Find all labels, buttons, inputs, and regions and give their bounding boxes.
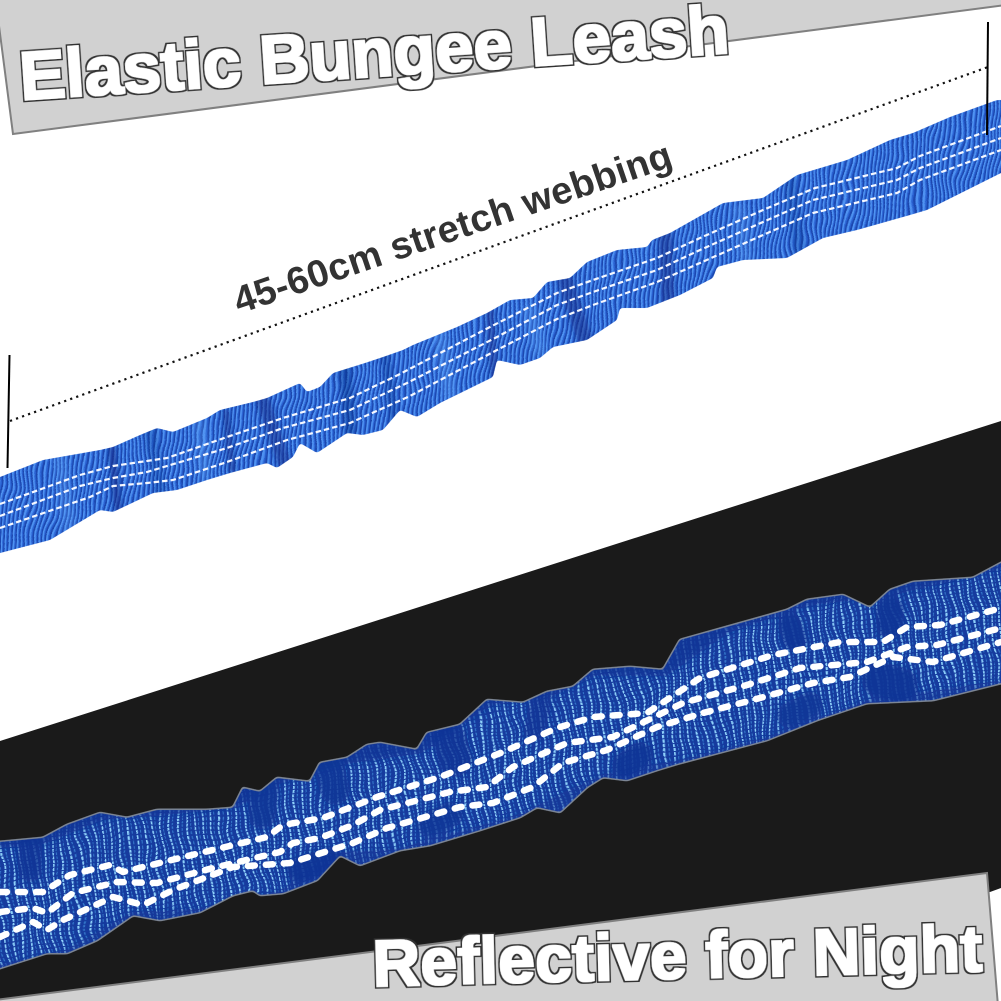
right measuring tick	[987, 22, 988, 135]
dotted measuring line	[10, 67, 988, 421]
reflective stitching lines (night)	[0, 608, 1001, 937]
blue bungee strap (daytime)	[0, 80, 1001, 580]
length label: 45-60cm stretch webbing	[228, 135, 677, 323]
bottom title banner	[0, 873, 998, 1001]
reflective blue strap (night)	[0, 540, 1001, 990]
black night background panel	[0, 421, 1001, 1001]
title: Reflective for Night: Reflective for Night	[372, 911, 983, 1000]
panel: top title banner	[0, 0, 1001, 134]
left measuring tick	[8, 355, 10, 468]
reflective stitching lines (daytime)	[0, 126, 1001, 528]
